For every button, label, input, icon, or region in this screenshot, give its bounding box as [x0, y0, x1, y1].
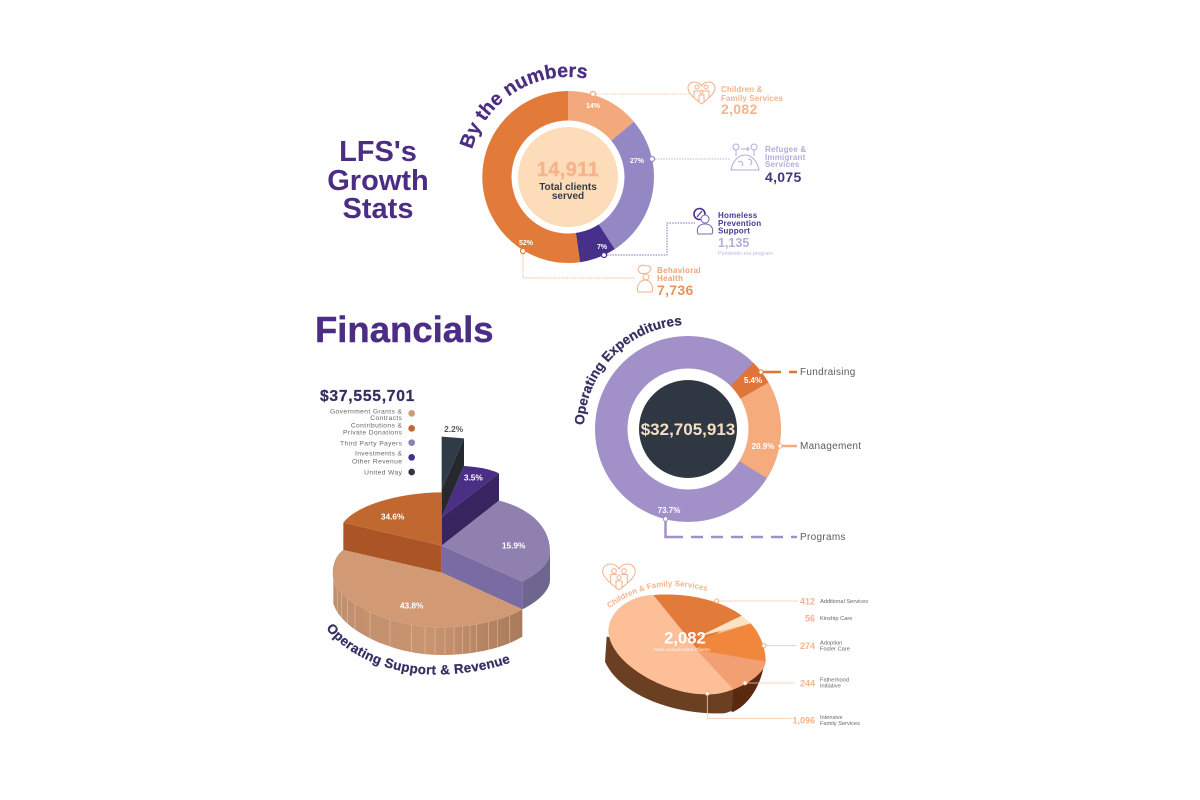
title: LFS's Growth Stats: Stats	[343, 193, 413, 225]
legend: Government Grants &	[330, 408, 402, 415]
label: refugee and immigrant services: Refugee &	[765, 145, 806, 154]
section: by the numbers	[459, 64, 806, 298]
slice: adoption foster care	[697, 623, 766, 662]
label: refugee and immigrant services: Services	[765, 160, 800, 169]
donut chart: total clients served: 27%	[630, 158, 645, 165]
category labels: Family Services	[820, 721, 860, 727]
heading: Operating Expenditures: Operating Expenditures	[574, 318, 682, 424]
donut chart: expenditures: 5.4%	[744, 376, 762, 385]
infographic	[317, 64, 868, 726]
label: homeless prevention support: Support	[718, 226, 750, 236]
donut chart: total clients served: 7%	[597, 244, 608, 251]
icon: heart family	[603, 564, 635, 590]
category labels: Foster Care	[820, 647, 850, 653]
callout: fundraising	[759, 367, 856, 378]
category labels: Initiative	[820, 684, 841, 690]
heading: Financials: Financials	[315, 309, 494, 350]
category labels: Intensive	[820, 715, 843, 721]
slice: intensive family services	[608, 595, 766, 694]
slice: government grants 43.8%: 43.8%	[400, 600, 424, 610]
donut chart: total clients served: 52%	[519, 240, 534, 247]
donut chart: total clients served: served	[552, 191, 584, 202]
legend: United Way	[364, 469, 403, 476]
donut chart: expenditures	[595, 336, 781, 522]
label: behavioral health: Health	[657, 274, 683, 283]
leader dots	[705, 599, 766, 695]
slice: third party payers 15.9%: 15.9%	[502, 540, 526, 550]
callout: programs: Programs	[800, 532, 846, 543]
label: children and family services: Family Services	[721, 94, 783, 103]
values: 1,096	[793, 715, 815, 725]
center total: Total unduplicated Clients	[653, 647, 711, 653]
label: homeless prevention support: 1,135	[718, 236, 749, 250]
legend	[330, 408, 415, 476]
legend: Contributions &	[351, 423, 402, 430]
values	[793, 597, 815, 725]
slice: contributions 34.6%: 34.6%	[381, 511, 405, 521]
slice: government grants 43.8%	[333, 550, 522, 657]
title: LFS's Growth Stats	[327, 136, 429, 225]
donut chart: total clients served: 14,911	[537, 159, 599, 181]
label: refugee and immigrant services	[765, 145, 806, 185]
label: homeless prevention support: Pandemic era program	[718, 251, 773, 257]
center total: 2,082	[664, 628, 706, 647]
legend: Contracts	[370, 415, 403, 422]
values: 56	[805, 613, 815, 623]
callout: fundraising: Fundraising	[800, 367, 856, 378]
label: refugee and immigrant services: 4,075	[765, 169, 802, 185]
label: behavioral health: Behavioral	[657, 266, 701, 275]
heading: Operating Support & Revenue: Operating Support & Revenue	[328, 624, 510, 676]
label: children and family services	[721, 85, 783, 117]
label: refugee and immigrant services: Immigrant	[765, 153, 806, 162]
total: $37,555,701: $37,555,701	[320, 388, 415, 405]
donut chart: expenditures: 20.9%	[752, 442, 774, 451]
donut chart: expenditures: 73.7%	[658, 506, 680, 515]
label: behavioral health: 7,736	[657, 282, 694, 298]
section: operating support and revenue	[320, 388, 550, 676]
values: 244	[800, 678, 815, 688]
legend: Third Party Payers	[340, 440, 403, 447]
section: children and family services	[602, 564, 868, 727]
category labels: Kinship Care	[820, 616, 852, 622]
donut chart: total clients served: Total clients	[539, 182, 597, 193]
donut chart: total clients served	[482, 91, 654, 263]
center total	[653, 628, 711, 653]
category labels: Additional Services	[820, 599, 868, 605]
values: 274	[800, 641, 815, 651]
slice: united way 2.2%	[442, 424, 464, 517]
label: homeless prevention support: Prevention	[718, 219, 761, 228]
donut chart: expenditures: $32,705,913	[641, 420, 735, 439]
heading: Children & Family Services: Children & Family Services	[607, 580, 708, 608]
heading: By the numbers: By the numbers	[459, 64, 587, 148]
icon: homeless prevention person	[694, 208, 713, 234]
legend: Investments &	[355, 451, 402, 458]
label: homeless prevention support: Homeless	[718, 211, 758, 220]
legend: Private Donations	[343, 429, 403, 436]
label: homeless prevention support	[718, 211, 773, 257]
callout: management: Management	[800, 441, 861, 452]
title: LFS's Growth Stats: LFS's	[339, 136, 417, 168]
category labels: Adoption	[820, 640, 842, 646]
3D pie chart	[605, 595, 766, 713]
category labels: Fatherhood	[820, 677, 849, 683]
connector dots	[520, 92, 654, 258]
slice: kinship care	[698, 616, 751, 637]
callout: programs	[663, 517, 846, 543]
icon: heart family	[688, 82, 715, 104]
slice: third party payers 15.9%	[442, 501, 550, 609]
label: children and family services: 2,082	[721, 101, 758, 117]
values: 412	[800, 597, 815, 607]
icon: refugee globe with pins	[731, 144, 759, 170]
slice: investments 3.5%	[442, 466, 499, 546]
slice: fatherhood initiative	[697, 650, 766, 689]
connector lines	[523, 94, 730, 278]
slice: additional services	[653, 595, 742, 648]
3D pie chart	[333, 424, 550, 657]
label: children and family services: Children &	[721, 85, 763, 94]
icon: behavioral health head	[637, 265, 653, 292]
slice: united way 2.2%: 2.2%	[444, 424, 464, 434]
category labels	[820, 599, 868, 727]
title: LFS's Growth Stats: Growth	[327, 165, 429, 197]
legend: Other Revenue	[352, 458, 402, 465]
label: behavioral health	[657, 266, 701, 298]
donut chart: total clients served: 14%	[586, 103, 601, 110]
slice: investments 3.5%: 3.5%	[464, 473, 483, 483]
leader lines	[707, 601, 798, 718]
slice: contributions 34.6%	[343, 492, 442, 573]
section: operating expenditures	[574, 318, 861, 543]
